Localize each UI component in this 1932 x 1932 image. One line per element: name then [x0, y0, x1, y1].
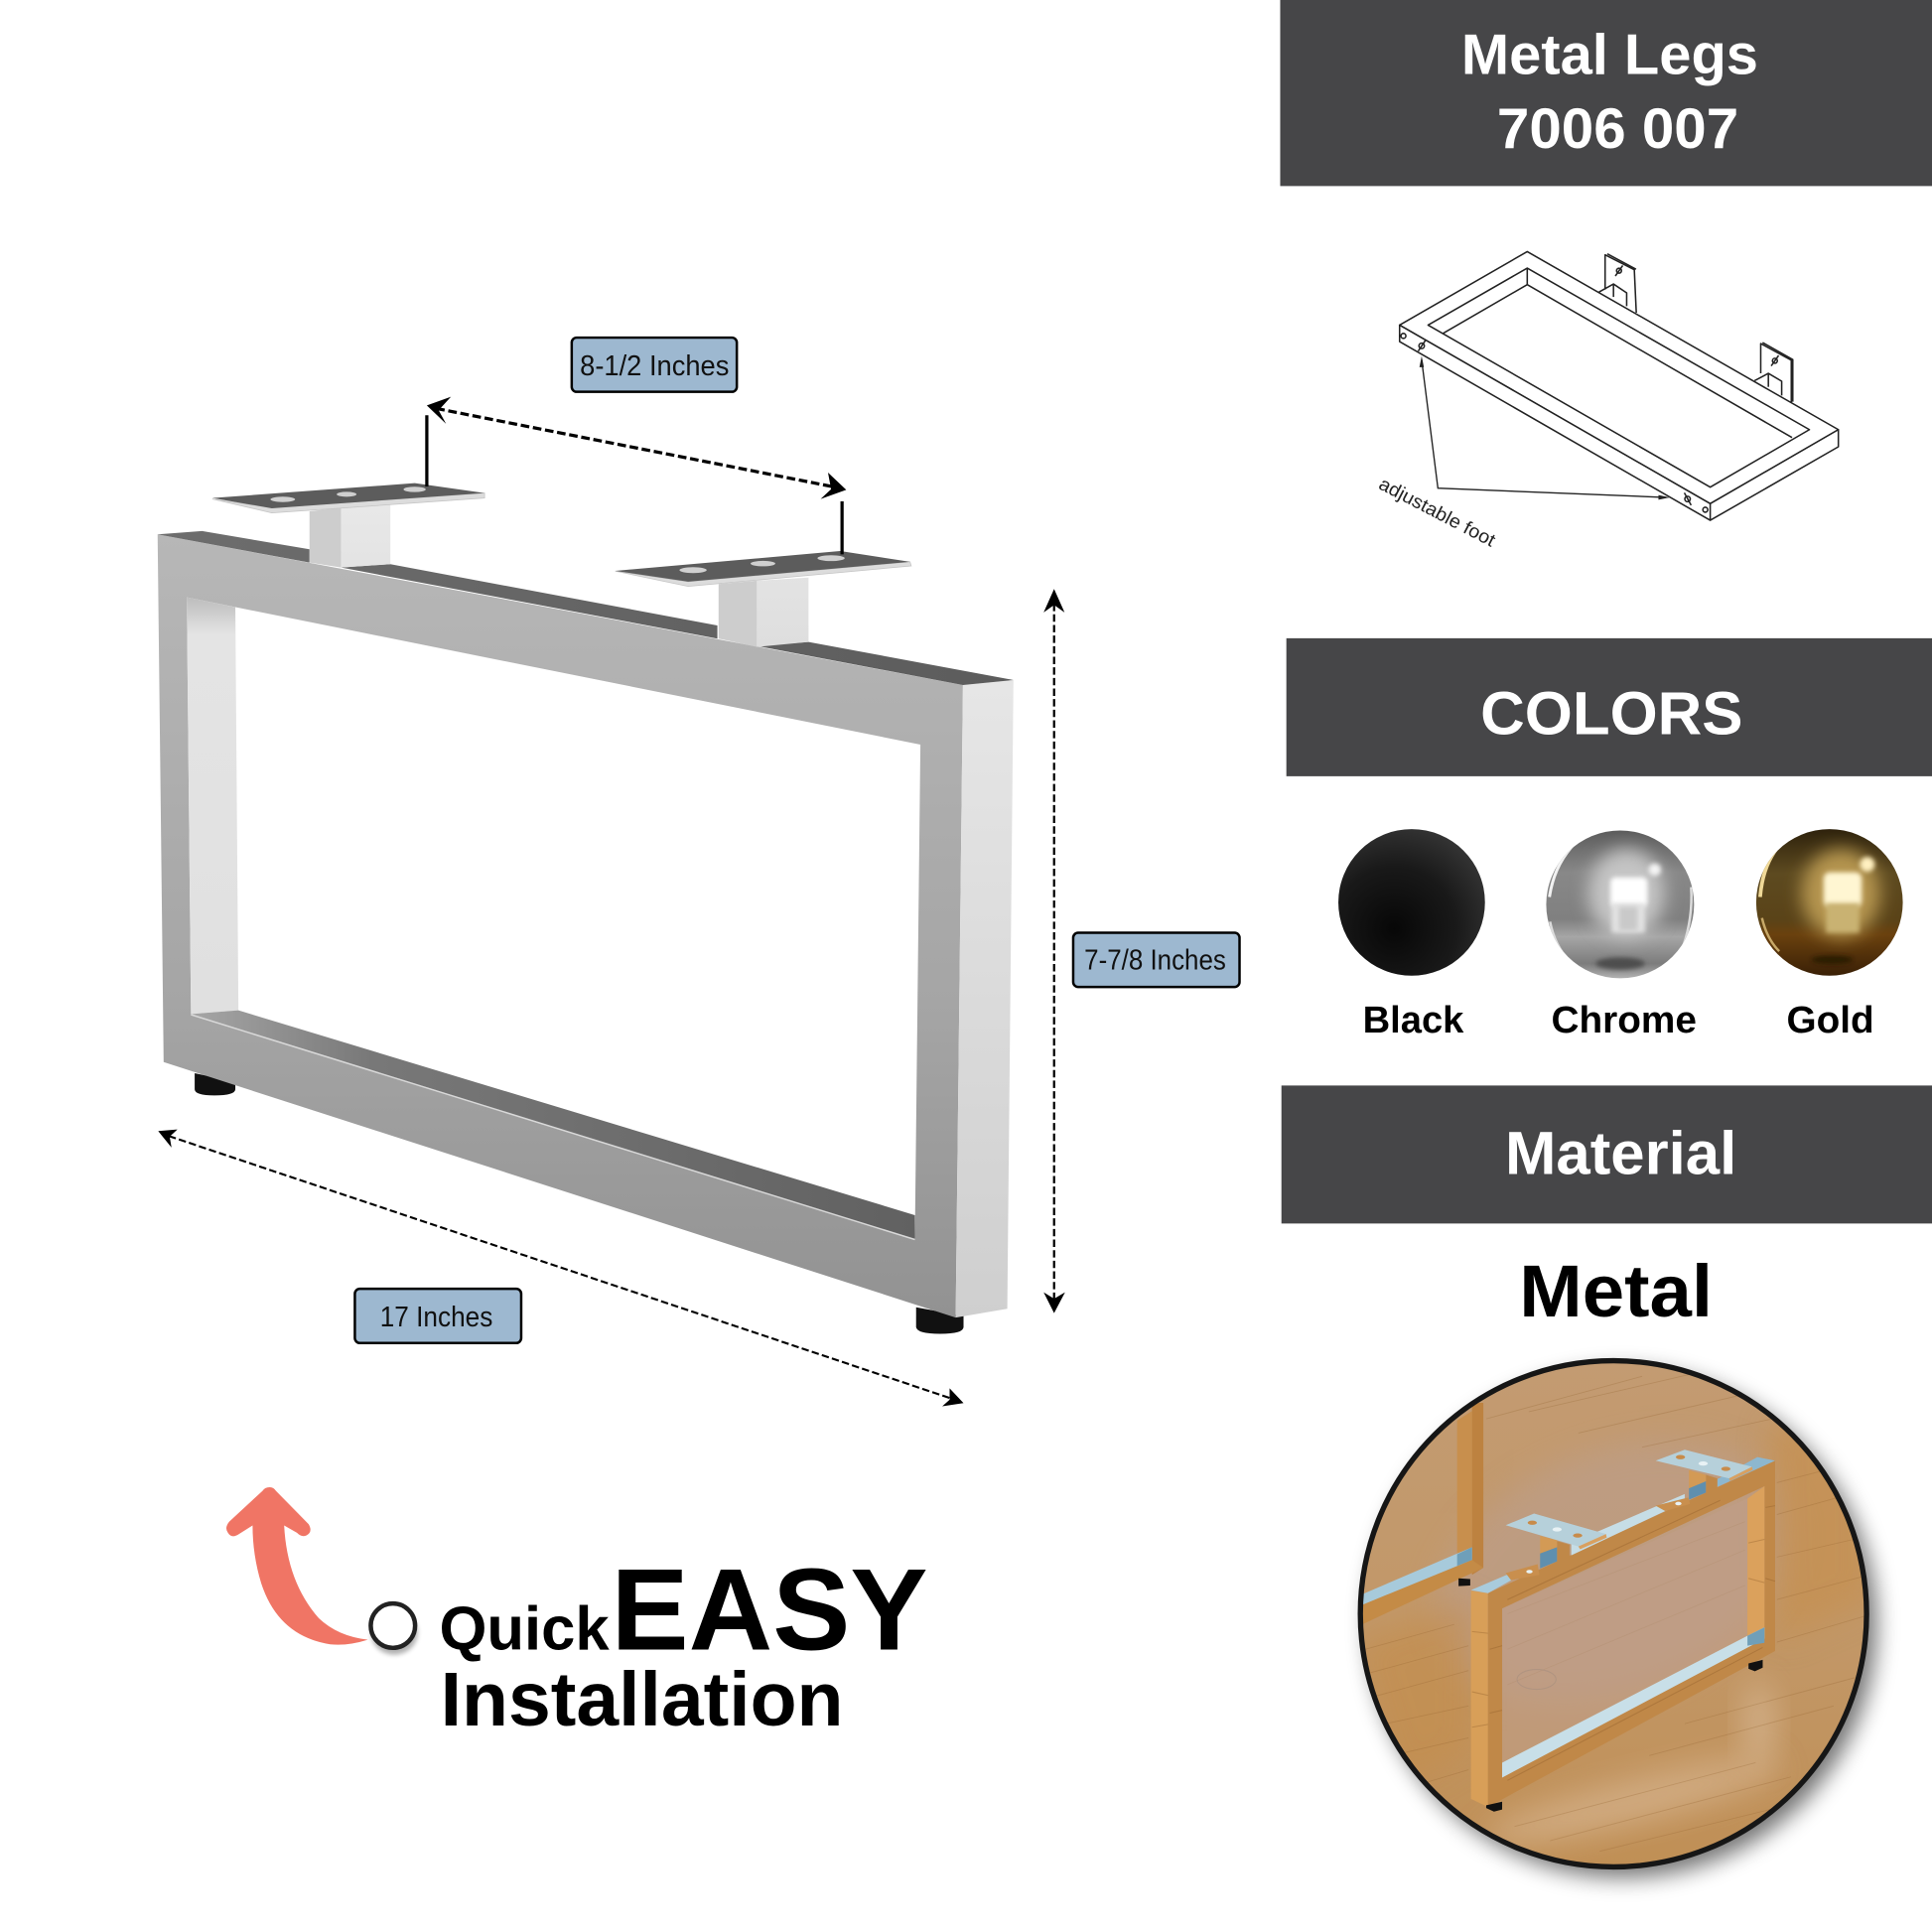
quick easy installation callout — [226, 1487, 928, 1742]
frame right side face — [956, 680, 1014, 1317]
label: 8-1/2 Inches — [580, 350, 729, 382]
foreground leg — [1471, 1449, 1775, 1812]
guide lines — [427, 415, 842, 554]
text: Quick: Quick — [439, 1595, 610, 1664]
dashed arrow — [1043, 589, 1065, 1313]
color swatches — [1338, 829, 1903, 1041]
dashed arrow — [158, 1130, 964, 1407]
dimension: 17 inches — [158, 1130, 964, 1407]
round photo: frame on wood floor — [1355, 1355, 1876, 1877]
background leg — [1362, 1403, 1483, 1624]
right mount plate — [616, 551, 911, 587]
header: Material: Material — [1505, 1120, 1736, 1188]
left mount post — [310, 504, 390, 568]
header: Material — [1282, 1085, 1932, 1223]
header: COLORS — [1287, 638, 1932, 776]
text: EASY: EASY — [612, 1545, 928, 1675]
callout label: adjustable foot — [1376, 473, 1500, 551]
swatch: chrome — [1546, 830, 1697, 1041]
header: Metal Legs 7006 007: Metal Legs — [1461, 23, 1758, 86]
line drawing: frame with adjustable foot callout — [1376, 251, 1839, 551]
material value: Metal — [1519, 1250, 1713, 1332]
photo border — [1360, 1361, 1866, 1866]
frame outline — [1400, 251, 1839, 520]
header: Metal Legs 7006 007: 7006 007 — [1497, 97, 1738, 161]
photo shadow — [1369, 1370, 1876, 1877]
dashed arrow — [427, 397, 846, 499]
foot left — [195, 1073, 235, 1095]
right mount post — [719, 578, 808, 647]
swatch: black — [1338, 829, 1485, 1041]
swatch: chrome: Chrome — [1552, 1000, 1697, 1041]
icon: curved coral arrow — [226, 1487, 368, 1645]
dimension: 8-1/2 inches — [427, 338, 846, 554]
icon: ring — [370, 1603, 418, 1655]
label — [1073, 932, 1240, 987]
callout arrow lines — [1420, 356, 1670, 499]
swatch: black: Black — [1363, 1000, 1464, 1041]
dimension: 7-7/8 inches — [1043, 589, 1240, 1313]
label: 7-7/8 Inches — [1084, 945, 1226, 977]
frame top surface — [158, 531, 1014, 685]
swatch: gold — [1756, 829, 1903, 1041]
text: Installation: Installation — [441, 1657, 844, 1742]
frame inner bottom face — [191, 1011, 914, 1239]
label — [354, 1289, 521, 1343]
frame inner left face — [187, 598, 238, 1014]
header: COLORS: COLORS — [1480, 680, 1742, 749]
mounting plates behind frame — [1599, 254, 1793, 402]
swatch: gold: Gold — [1787, 1000, 1874, 1041]
left mount plate — [212, 483, 484, 513]
frame front face — [158, 534, 963, 1317]
product: metal frame leg — [158, 483, 1014, 1333]
header: Metal Legs 7006 007 — [1280, 0, 1932, 186]
foot right — [916, 1308, 964, 1333]
label: 17 Inches — [380, 1302, 492, 1333]
label — [572, 338, 737, 392]
